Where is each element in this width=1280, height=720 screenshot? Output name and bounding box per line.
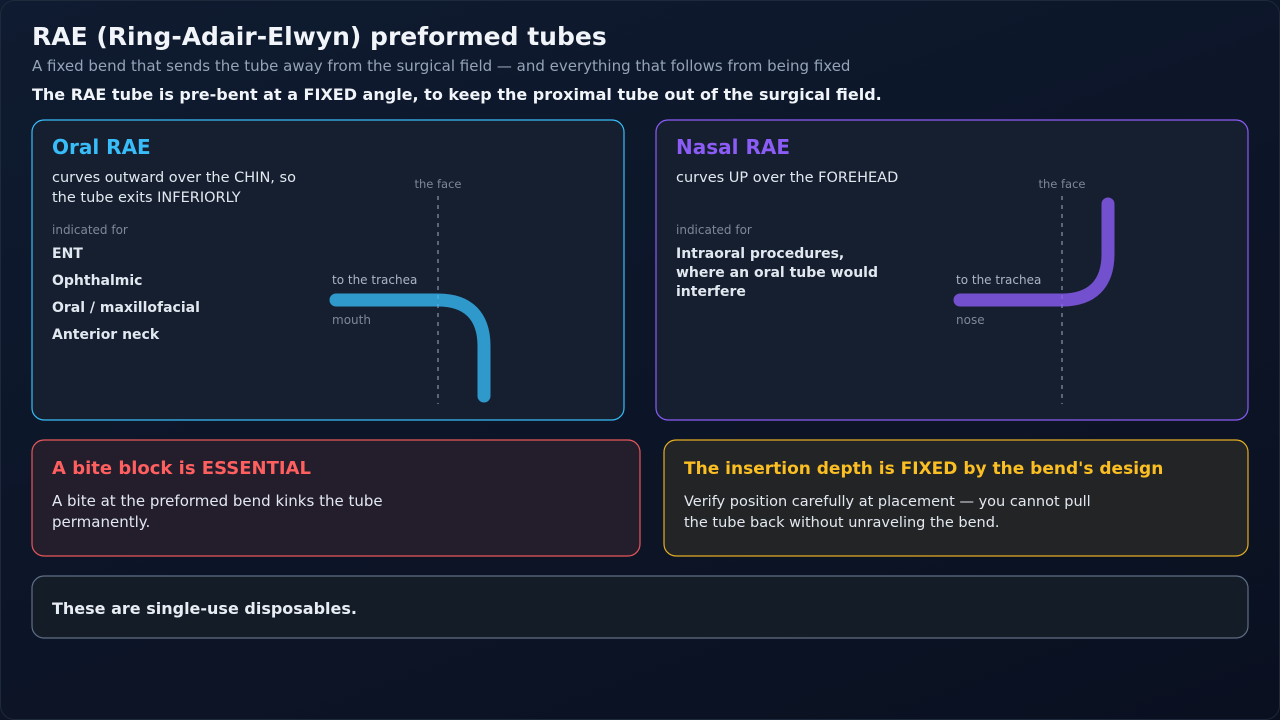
bite block text: permanently. [52, 513, 150, 531]
oral RAE indications list: Ophthalmic [52, 273, 142, 289]
panel: nasal RAE [655, 119, 1249, 421]
callout: single-use note [31, 575, 1249, 639]
key statement: The RAE tube is pre-bent at a FIXED angle, to keep the proximal tube out of the surgical field. [32, 85, 882, 104]
insertion depth text: the tube back without unraveling the bend. [684, 515, 1000, 531]
oral RAE indications list [52, 246, 200, 343]
single-use text: These are single-use disposables. [52, 599, 357, 618]
nasal RAE indication: where an oral tube would [676, 265, 878, 281]
indicated for label: indicated for [676, 223, 752, 237]
indicated for label: indicated for [52, 223, 128, 237]
oral RAE heading: Oral RAE [52, 135, 151, 159]
nasal RAE heading: Nasal RAE [676, 135, 790, 159]
oral RAE indications list: Anterior neck [52, 327, 159, 343]
insertion depth text [684, 494, 1091, 531]
panel: oral RAE [31, 119, 625, 421]
diagram: nasal RAE tube: the face [1038, 177, 1086, 191]
callout: bite block [31, 439, 641, 557]
insertion depth text: Verify position carefully at placement — you cannot pull [684, 494, 1091, 510]
nasal RAE indication: Intraoral procedures, [676, 246, 844, 262]
nasal RAE indication: interfere [676, 284, 746, 300]
diagram: oral RAE tube: mouth [332, 313, 371, 327]
bite block heading: A bite block is ESSENTIAL [52, 458, 311, 479]
diagram: nasal RAE tube: nose [956, 313, 985, 327]
bite block text: A bite at the preformed bend kinks the tube [52, 492, 383, 510]
diagram: nasal RAE tube: to the trachea [956, 273, 1041, 287]
nasal RAE description: curves UP over the FOREHEAD [676, 170, 898, 186]
diagram: oral RAE tube: the face [414, 177, 462, 191]
oral RAE indications list: ENT [52, 246, 83, 262]
oral RAE description [52, 170, 296, 206]
title: RAE (Ring-Adair-Elwyn) preformed tubes [32, 22, 607, 51]
insertion depth heading: The insertion depth is FIXED by the bend's design [684, 459, 1163, 479]
bite block text [52, 492, 383, 531]
callout: insertion depth [663, 439, 1249, 557]
oral RAE indications list: Oral / maxillofacial [52, 300, 200, 316]
nasal RAE indication [676, 246, 878, 300]
diagram: oral RAE tube: to the trachea [332, 273, 417, 287]
oral RAE description: the tube exits INFERIORLY [52, 190, 241, 206]
subtitle: A fixed bend that sends the tube away from the surgical field — and everything that follows from being fixed [32, 57, 850, 75]
oral RAE description: curves outward over the CHIN, so [52, 170, 296, 186]
